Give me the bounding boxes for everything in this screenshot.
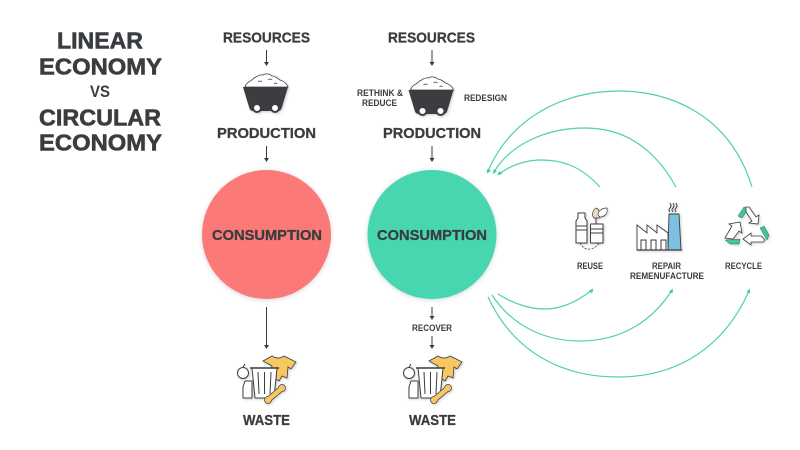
- heading: resources: RESOURCES: [223, 30, 310, 46]
- label: repair remanufacture: [630, 261, 704, 281]
- consumption circle: green: [368, 170, 496, 299]
- title: CIRCULAR: [39, 104, 161, 130]
- return arrows: back to production: [486, 91, 752, 187]
- panel: linear economy flow: [202, 30, 331, 429]
- title: VS: [90, 82, 110, 101]
- label: rethink and reduce: [357, 88, 403, 108]
- forward arrows: to reuse, repair and recycle: [488, 288, 750, 377]
- title: [39, 28, 162, 156]
- label: waste: WASTE: [243, 412, 290, 429]
- title: LINEAR: [57, 28, 143, 54]
- arrow: recover to waste: [430, 336, 434, 349]
- label: rethink and reduce: REDUCE: [362, 98, 397, 108]
- arrow: consumption to waste: [264, 307, 269, 349]
- icon: waste: [404, 356, 462, 404]
- icon: reuse: [576, 208, 607, 249]
- consumption circle: green: CONSUMPTION: [377, 227, 487, 244]
- label: recycle: RECYCLE: [725, 261, 762, 271]
- label: repair remanufacture: REPAIR: [652, 261, 681, 271]
- label: reuse: REUSE: [577, 261, 603, 271]
- heading: production: PRODUCTION: [217, 125, 316, 142]
- consumption circle: red: [202, 170, 331, 299]
- arrow: resources to cart: [264, 50, 269, 66]
- label: recover: RECOVER: [412, 323, 452, 333]
- title: ECONOMY: [39, 130, 162, 156]
- heading: production: PRODUCTION: [383, 125, 481, 142]
- arrow: production to consumption: [264, 146, 269, 162]
- label: repair remanufacture: REMENUFACTURE: [630, 271, 704, 281]
- label: rethink and reduce: RETHINK &: [357, 88, 403, 98]
- icon: recycle: [725, 207, 769, 245]
- label: waste: WASTE: [409, 412, 456, 429]
- icon: mine cart: [408, 77, 454, 115]
- arrow: production to consumption: [430, 146, 434, 162]
- arrow: consumption to recover: [430, 307, 434, 320]
- consumption circle: red: CONSUMPTION: [212, 227, 322, 244]
- arrow: resources to cart: [430, 50, 434, 66]
- icon: repair factory: [637, 203, 682, 250]
- icon: mine cart: [243, 74, 288, 112]
- heading: resources: RESOURCES: [388, 30, 475, 46]
- title: ECONOMY: [39, 54, 162, 80]
- panel: circular economy flow: [357, 30, 507, 429]
- icon: waste: [238, 356, 296, 404]
- label: redesign: REDESIGN: [464, 93, 507, 103]
